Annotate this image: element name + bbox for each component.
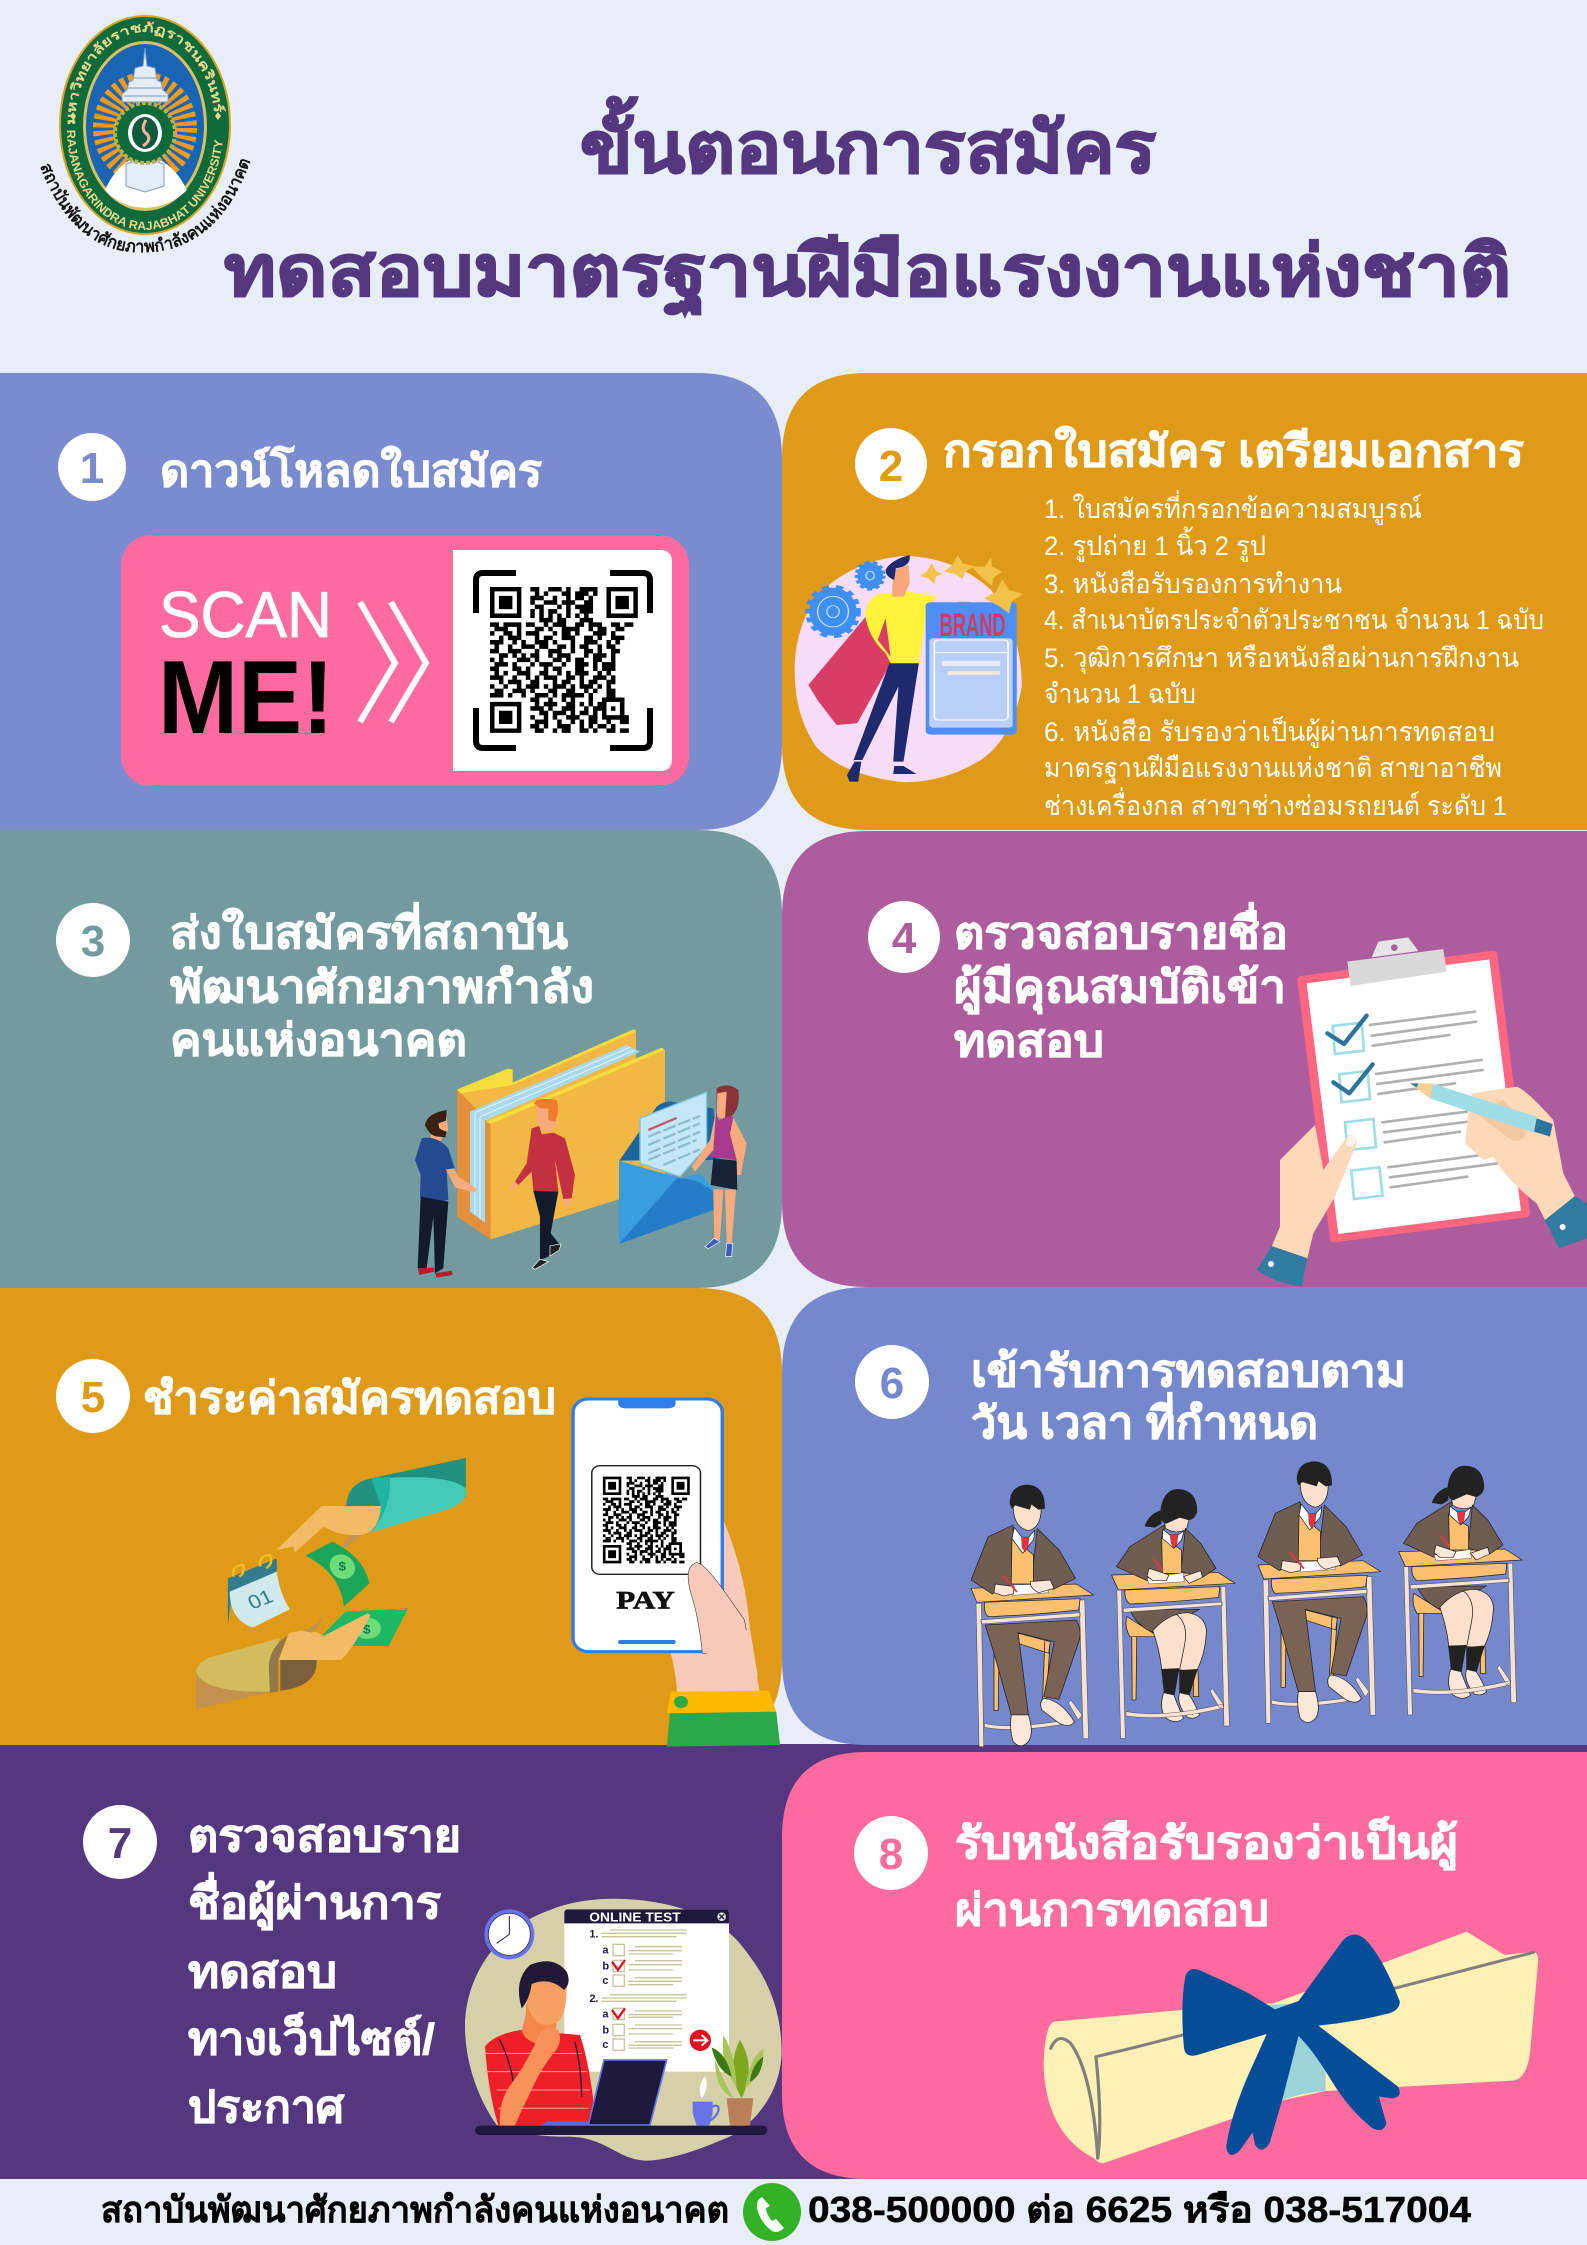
step 7 heading: ชื่อผู้ผ่านการ [188, 1872, 441, 1930]
illustration: man taking online test: b [602, 1960, 609, 1972]
illustration: rolled diploma with bow [1044, 1932, 1538, 2163]
document list: จำนวน 1 ฉบับ [1044, 679, 1196, 709]
step 6 heading: วัน เวลา ที่กำหนด [971, 1392, 1318, 1448]
document list: มาตรฐานฝีมือแรงงานแห่งชาติ สาขาอาชีพ [1044, 753, 1502, 784]
title: ทดสอบมาตรฐานฝีมือแรงงานแห่งชาติ [224, 232, 1511, 316]
step 7 number: 7 [108, 1819, 132, 1868]
panel 7 backdrop: step 7 [0, 1744, 1587, 2179]
step 6 heading [971, 1347, 1406, 1448]
logo: university seal [40, 15, 250, 253]
step 3 heading [170, 902, 594, 1065]
logo: university seal: สถาบันพัฒนาศักยภาพกำลังคนแห่งอนาคต [40, 159, 250, 253]
panel 3: send application [0, 830, 782, 1288]
step 3 heading: คนแห่งอนาคต [170, 1016, 467, 1065]
footer: contact line [101, 2183, 1471, 2241]
step 6 number [855, 1345, 929, 1419]
illustration: man taking online test: a [602, 2008, 609, 2020]
step 4 number: 4 [892, 914, 917, 963]
panel 5: pay application fee [0, 1288, 782, 1747]
illustration: man taking online test [465, 1899, 782, 2161]
step 3 number: 3 [81, 917, 105, 966]
panel 6: take the test [782, 1287, 1587, 1747]
panel 4: check list of names [782, 831, 1587, 1287]
step 3 number [56, 903, 130, 977]
document list: 2. รูปถ่าย 1 นิ้ว 2 รูป [1044, 526, 1266, 562]
illustration: four students at desks [971, 1462, 1522, 1747]
title: ขั้นตอนการสมัคร [580, 96, 1156, 187]
illustration: hands exchanging money [196, 1458, 466, 1709]
document list: 3. หนังสือรับรองการทำงาน [1044, 569, 1342, 599]
step 6 number: 6 [880, 1359, 904, 1408]
step 1 heading: ดาวน์โหลดใบสมัคร [160, 444, 542, 496]
step 7 heading: ตรวจสอบราย [188, 1812, 461, 1861]
illustration: people with folder and envelope [415, 1029, 747, 1278]
step 1 number: 1 [80, 444, 104, 493]
step 7 heading: ทดสอบ [188, 1948, 337, 1997]
illustration: man taking online test: c [602, 2039, 608, 2051]
step 8 heading: ผ่านการทดสอบ [955, 1886, 1269, 1935]
arrow: double chevron [360, 602, 426, 722]
document list: 1. ใบสมัครที่กรอกข้อความสมบูรณ์ [1044, 490, 1422, 525]
step 4 heading: ทดสอบ [954, 1017, 1104, 1066]
step 4 heading [954, 902, 1288, 1066]
step 2 number [855, 428, 927, 500]
panel 1: download application [0, 373, 782, 830]
illustration: superhero with brand board [795, 555, 1023, 782]
step 7 heading [188, 1812, 461, 2132]
document list: 6. หนังสือ รับรองว่าเป็นผู้ผ่านการทดสอบ [1044, 714, 1495, 748]
illustration: man taking online test: a [602, 1944, 609, 1956]
step 3 heading: พัฒนาศักยภาพกำลัง [170, 963, 594, 1012]
illustration: man taking online test: 2. [589, 1993, 598, 2005]
step 5 heading: ชำระค่าสมัครทดสอบ [143, 1374, 556, 1423]
scan me card: ME! [158, 640, 334, 756]
panel 2: fill form, prepare documents: BRAND [940, 607, 1005, 643]
illustration: man taking online test: c [602, 1975, 608, 1987]
illustration: man taking online test: b [602, 2024, 609, 2036]
logo: university seal: RAJANAGARINDRA RAJABHAT UNIVERSITY [66, 130, 222, 230]
icon: phone [743, 2183, 801, 2241]
QR code [453, 550, 672, 771]
step 2 number: 2 [879, 442, 903, 491]
step 8 heading [955, 1816, 1458, 1935]
step 8 heading: รับหนังสือรับรองว่าเป็นผู้ [955, 1816, 1458, 1870]
step 5 number [56, 1359, 130, 1433]
illustration: hands exchanging money: 01 [244, 1586, 277, 1614]
document list: 4. สำเนาบัตรประจำตัวประชาชน จำนวน 1 ฉบับ [1044, 605, 1544, 635]
step 4 number [868, 901, 940, 973]
title [224, 96, 1511, 316]
step 7 heading: ประกาศ [188, 2083, 345, 2132]
document list: ช่างเครื่องกล สาขาช่างซ่อมรถยนต์ ระดับ 1 [1044, 787, 1507, 821]
footer: contact line: สถาบันพัฒนาศักยภาพกำลังคนแห่งอนาคต [101, 2189, 729, 2230]
illustration: hands exchanging money: $ [338, 1560, 346, 1573]
illustration: man taking online test: ONLINE TEST [589, 1909, 681, 1924]
illustration: hands exchanging money: $ [363, 1622, 371, 1636]
panel 2: fill form, prepare documents [782, 373, 1587, 830]
step 7 heading: ทางเว็ปไซต์/ [188, 2012, 435, 2064]
logo: university seal: มหาวิทยาลัยราชภัฏราชนครินทร์ [67, 22, 226, 124]
step 3 heading: ส่งใบสมัครที่สถาบัน [170, 902, 568, 958]
scan me card: SCAN [159, 578, 332, 651]
step 6 heading: เข้ารับการทดสอบตาม [971, 1347, 1406, 1396]
step 4 heading: ตรวจสอบรายชื่อ [954, 902, 1288, 958]
illustration: man taking online test: 1. [589, 1928, 598, 1940]
step 5 number: 5 [81, 1373, 105, 1422]
illustration: hand holding phone with QR pay [573, 1399, 780, 1747]
step 1 number [58, 433, 126, 501]
step 8 number [854, 1816, 928, 1890]
illustration: hand holding phone with QR pay: PAY [616, 1586, 675, 1614]
panel 8: receive certificate [782, 1752, 1587, 2179]
document list [1044, 490, 1544, 821]
footer: contact line: 038-500000 ต่อ 6625 หรือ 038-517004 [808, 2189, 1471, 2230]
step 7 number [83, 1805, 157, 1879]
step 2 heading: กรอกใบสมัคร เตรียมเอกสาร [943, 425, 1524, 476]
illustration: hands with clipboard checklist [1257, 937, 1587, 1287]
step 4 heading: ผู้มีคุณสมบัติเข้า [954, 963, 1286, 1015]
scan me card [121, 535, 689, 786]
document list: 5. วุฒิการศึกษา หรือหนังสือผ่านการฝึกงาน [1044, 643, 1519, 675]
step 8 number: 8 [879, 1830, 903, 1879]
